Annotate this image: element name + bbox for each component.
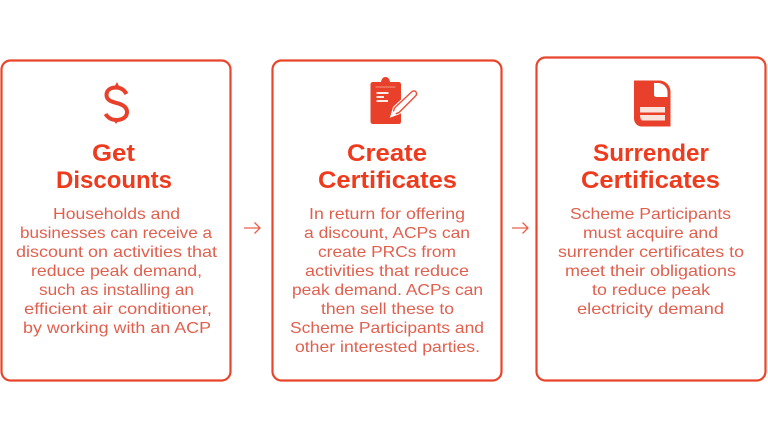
heading: create certificates: Certificates [318,167,457,194]
panel: surrender certificates [536,58,766,380]
text: surrender certificates description: electricity demand [577,301,724,318]
text: create certificates description: activities that reduce [305,263,469,280]
text: surrender certificates description: surrender certificates to [558,244,744,261]
text: get discounts description: reduce peak demand, [31,263,202,280]
text: surrender certificates description: meet their obligations [565,263,736,280]
arrow: to create certificates [244,222,260,234]
icon: document [634,80,670,126]
text: surrender certificates description: Scheme Participants [570,206,731,223]
text: get discounts description [16,206,218,337]
text: get discounts description: businesses can receive a [20,225,212,242]
panel: get discounts [2,60,230,380]
text: create certificates description: In return for offering [309,206,465,223]
text: create certificates description: Scheme Participants and [290,320,484,337]
icon: dollar sign [106,82,127,124]
heading: surrender certificates: Surrender [593,140,709,167]
heading: get discounts [56,140,172,194]
heading: create certificates: Create [347,140,427,167]
text: create certificates description [290,206,484,356]
text: get discounts description: by working with an ACP [23,320,211,337]
arrow: to surrender certificates [512,222,528,234]
icon: clipboard and pen [370,77,418,124]
text: get discounts description: discount on activities that [16,244,218,261]
text: surrender certificates description: to reduce peak [592,282,711,299]
heading: get discounts: Get [92,140,135,167]
heading: get discounts: Discounts [56,167,172,194]
text: get discounts description: efficient air conditioner, [24,301,212,318]
heading: surrender certificates: Certificates [581,167,720,194]
heading: surrender certificates [581,140,720,194]
text: get discounts description: Households and [53,206,180,223]
text: create certificates description: a discount, ACPs can [304,225,470,242]
text: create certificates description: other interested parties. [295,339,480,356]
text: get discounts description: such as installing an [39,282,194,299]
text: surrender certificates description [558,206,744,318]
text: create certificates description: create PRCs from [318,244,456,261]
panel: create certificates [272,60,502,380]
text: create certificates description: then sell these to [321,301,454,318]
text: surrender certificates description: must acquire and [583,225,718,242]
text: create certificates description: peak demand. ACPs can [292,282,483,299]
heading: create certificates [318,140,457,194]
